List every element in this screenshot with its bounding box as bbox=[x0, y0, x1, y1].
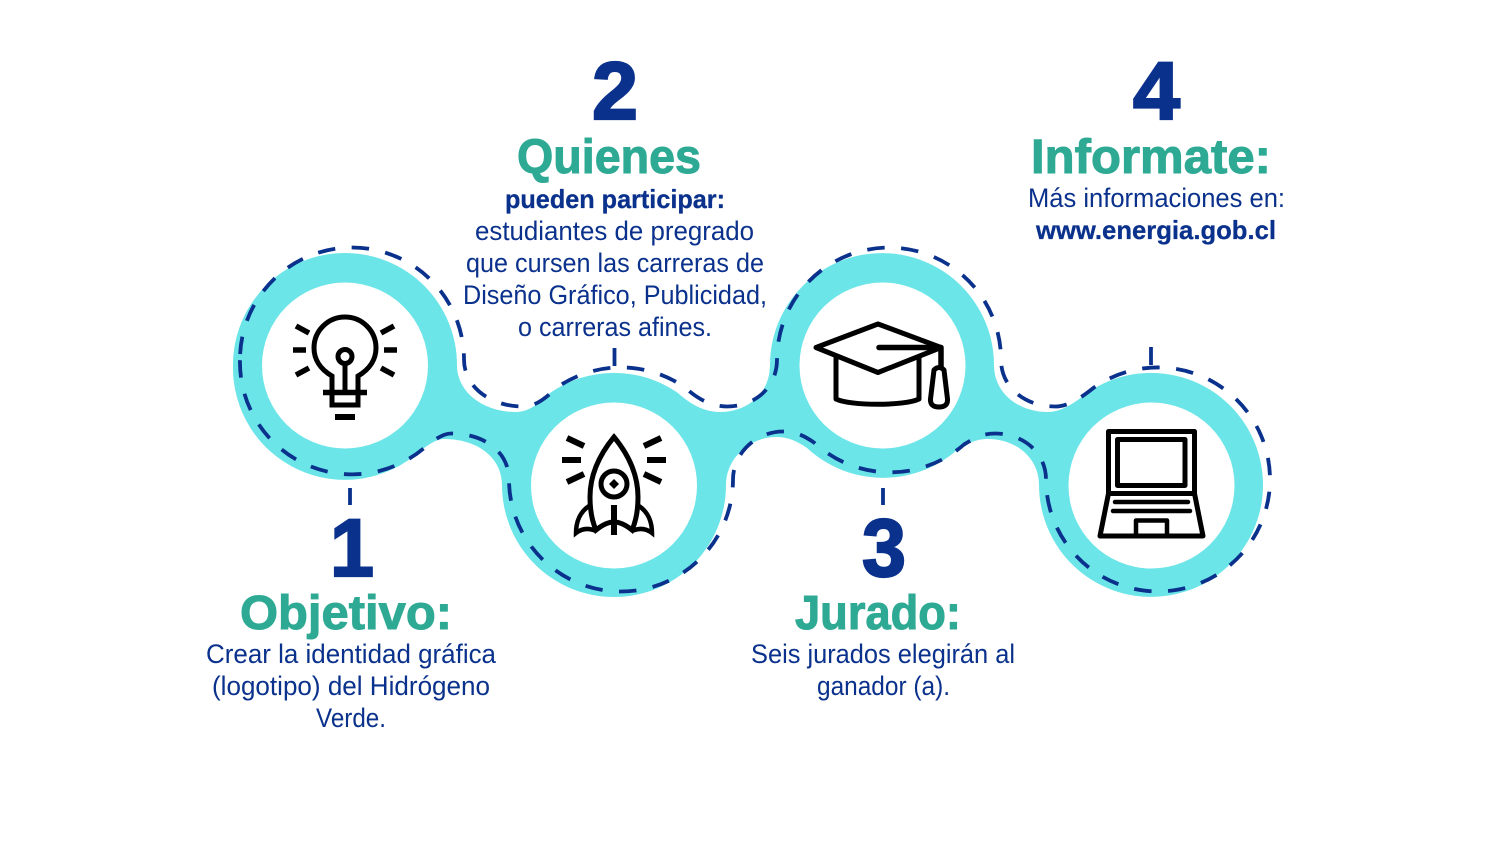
body text: objective: Crear la identidad gráfica bbox=[206, 639, 497, 669]
number 3: 3 bbox=[862, 503, 906, 594]
icon: light bulb bbox=[293, 317, 397, 417]
body text: participants: Diseño Gráfico, Publicidad, bbox=[463, 280, 767, 310]
body text: participants: o carreras afines. bbox=[518, 312, 712, 342]
body text: website: www.energia.gob.cl bbox=[1035, 215, 1276, 245]
icon: laptop bbox=[1100, 432, 1203, 536]
circle 4 bbox=[1068, 402, 1234, 568]
body text: jury: ganador (a). bbox=[817, 671, 950, 701]
icon: rocket bbox=[562, 437, 666, 535]
body text: jury: Seis jurados elegirán al bbox=[751, 639, 1015, 669]
block 2: who can participate bbox=[463, 46, 767, 342]
dashed outline bbox=[240, 248, 1270, 592]
number 1: 1 bbox=[330, 503, 374, 594]
number 4: 4 bbox=[1133, 46, 1180, 137]
block 3: jury bbox=[751, 503, 1015, 701]
circle 3 bbox=[800, 282, 966, 448]
body text: website bbox=[1028, 183, 1285, 245]
body text: participants bbox=[463, 184, 767, 342]
heading: Objetivo: Objetivo: bbox=[240, 587, 452, 640]
circle 1 bbox=[262, 282, 428, 448]
block 1: objective bbox=[206, 503, 497, 733]
body text: participants: pueden participar: bbox=[505, 184, 725, 214]
body text: jury bbox=[751, 639, 1015, 701]
block 4: more information bbox=[1028, 46, 1285, 245]
number 2: 2 bbox=[592, 46, 638, 137]
heading: Jurado: Jurado: bbox=[795, 587, 961, 640]
body text: participants: que cursen las carreras de bbox=[466, 248, 764, 278]
body text: objective: (logotipo) del Hidrógeno bbox=[212, 671, 490, 701]
body text: participants: estudiantes de pregrado bbox=[475, 216, 754, 246]
circle 2 bbox=[531, 402, 697, 568]
heading: Quienes: Quienes bbox=[517, 131, 701, 184]
connector ticks bbox=[350, 347, 1151, 505]
teal winding band bbox=[233, 253, 1263, 597]
heading: Informate: Informate: bbox=[1031, 131, 1271, 184]
icon: graduation cap bbox=[816, 324, 948, 407]
body text: website: Más informaciones en: bbox=[1028, 183, 1285, 213]
body text: objective: Verde. bbox=[316, 703, 386, 733]
body text: objective bbox=[206, 639, 497, 733]
